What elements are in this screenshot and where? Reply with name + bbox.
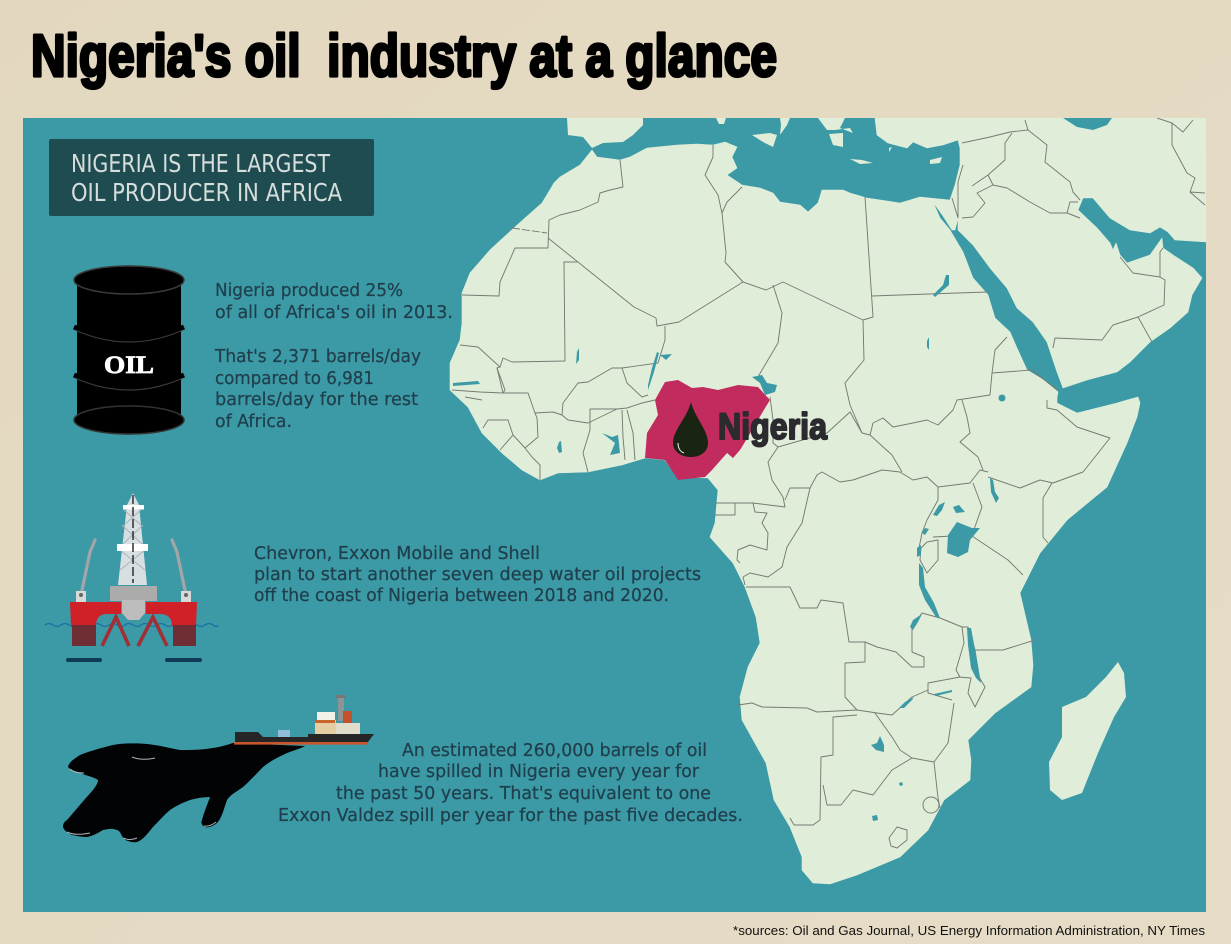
text: oil spills: the past 50 years. That's equivalent to one (336, 783, 711, 804)
text: oil spills (278, 740, 743, 826)
heading box (49, 139, 374, 216)
footer: sources: *sources: Oil and Gas Journal, US Energy Information Administration, NY Times (733, 924, 1205, 938)
text: production share: compared to 6,981 (215, 368, 374, 389)
rig: deck (76, 586, 191, 620)
text: production share: of Africa. (215, 411, 292, 432)
text: deep water projects (254, 543, 701, 606)
text: production share: barrels/day for the rest (215, 389, 418, 410)
text: deep water projects: off the coast of Nigeria between 2018 and 2020. (254, 585, 669, 606)
text: deep water projects: plan to start another seven deep water oil projects (254, 564, 701, 585)
map: Black Sea (1063, 118, 1112, 130)
heading box: OIL PRODUCER IN AFRICA (71, 178, 342, 207)
label: Nigeria: Nigeria (718, 406, 827, 447)
text: oil spills: have spilled in Nigeria every year for (378, 761, 700, 782)
map: country borders (452, 118, 1205, 848)
text: oil spills: An estimated 260,000 barrels of oil (402, 740, 707, 761)
rig: legs and pontoons (70, 602, 197, 646)
icon: oil barrel: OIL (104, 352, 154, 379)
map: lakes and rivers (453, 275, 1006, 821)
text: deep water projects: Chevron, Exxon Mobile and Shell (254, 543, 540, 564)
rig: crane arms (81, 540, 186, 595)
map: Nigeria highlight (645, 380, 770, 480)
text: production share: That's 2,371 barrels/day (214, 346, 421, 367)
title: Nigeria's oil industry at a glance (31, 23, 777, 89)
heading box: NIGERIA IS THE LARGEST (71, 149, 331, 178)
text: production share: Nigeria produced 25% (215, 280, 403, 301)
map: Europe and Mediterranean islands (567, 118, 942, 164)
icon: oil drop on Nigeria (673, 402, 708, 457)
icon: oil barrel (74, 266, 184, 434)
icon: oil tanker ship (234, 695, 374, 745)
map: Madagascar (1049, 662, 1126, 800)
text: oil spills: Exxon Valdez spill per year for the past five decades. (278, 805, 743, 826)
rig: derrick tower (117, 493, 148, 585)
icon: oil spill slick (63, 743, 305, 842)
rig: shadows (66, 658, 202, 662)
text: production share (214, 280, 453, 432)
text: production share: of all of Africa's oil in 2013. (215, 302, 453, 323)
map: land mass of Africa and Arabia (450, 118, 1206, 884)
rig: water line (45, 624, 218, 626)
icon: offshore oil rig (45, 493, 218, 662)
